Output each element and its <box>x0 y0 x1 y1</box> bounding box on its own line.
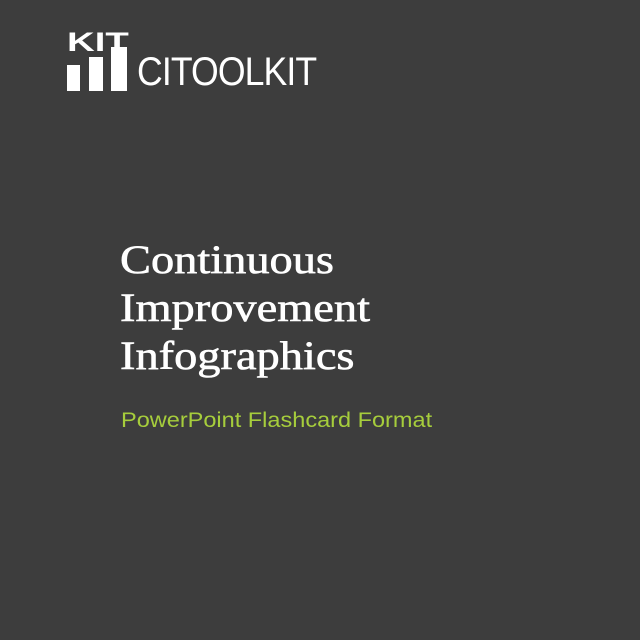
logo <box>67 27 316 94</box>
subtitle: PowerPoint Flashcard Format <box>121 409 432 432</box>
title <box>120 237 370 378</box>
logo wordmark: CITOOLKIT <box>137 50 316 94</box>
title: Improvement <box>120 285 370 330</box>
title: Continuous <box>120 237 334 282</box>
logo mark: KIT: KIT <box>67 27 129 57</box>
logo bars <box>67 47 127 91</box>
title: Infographics <box>120 333 355 378</box>
